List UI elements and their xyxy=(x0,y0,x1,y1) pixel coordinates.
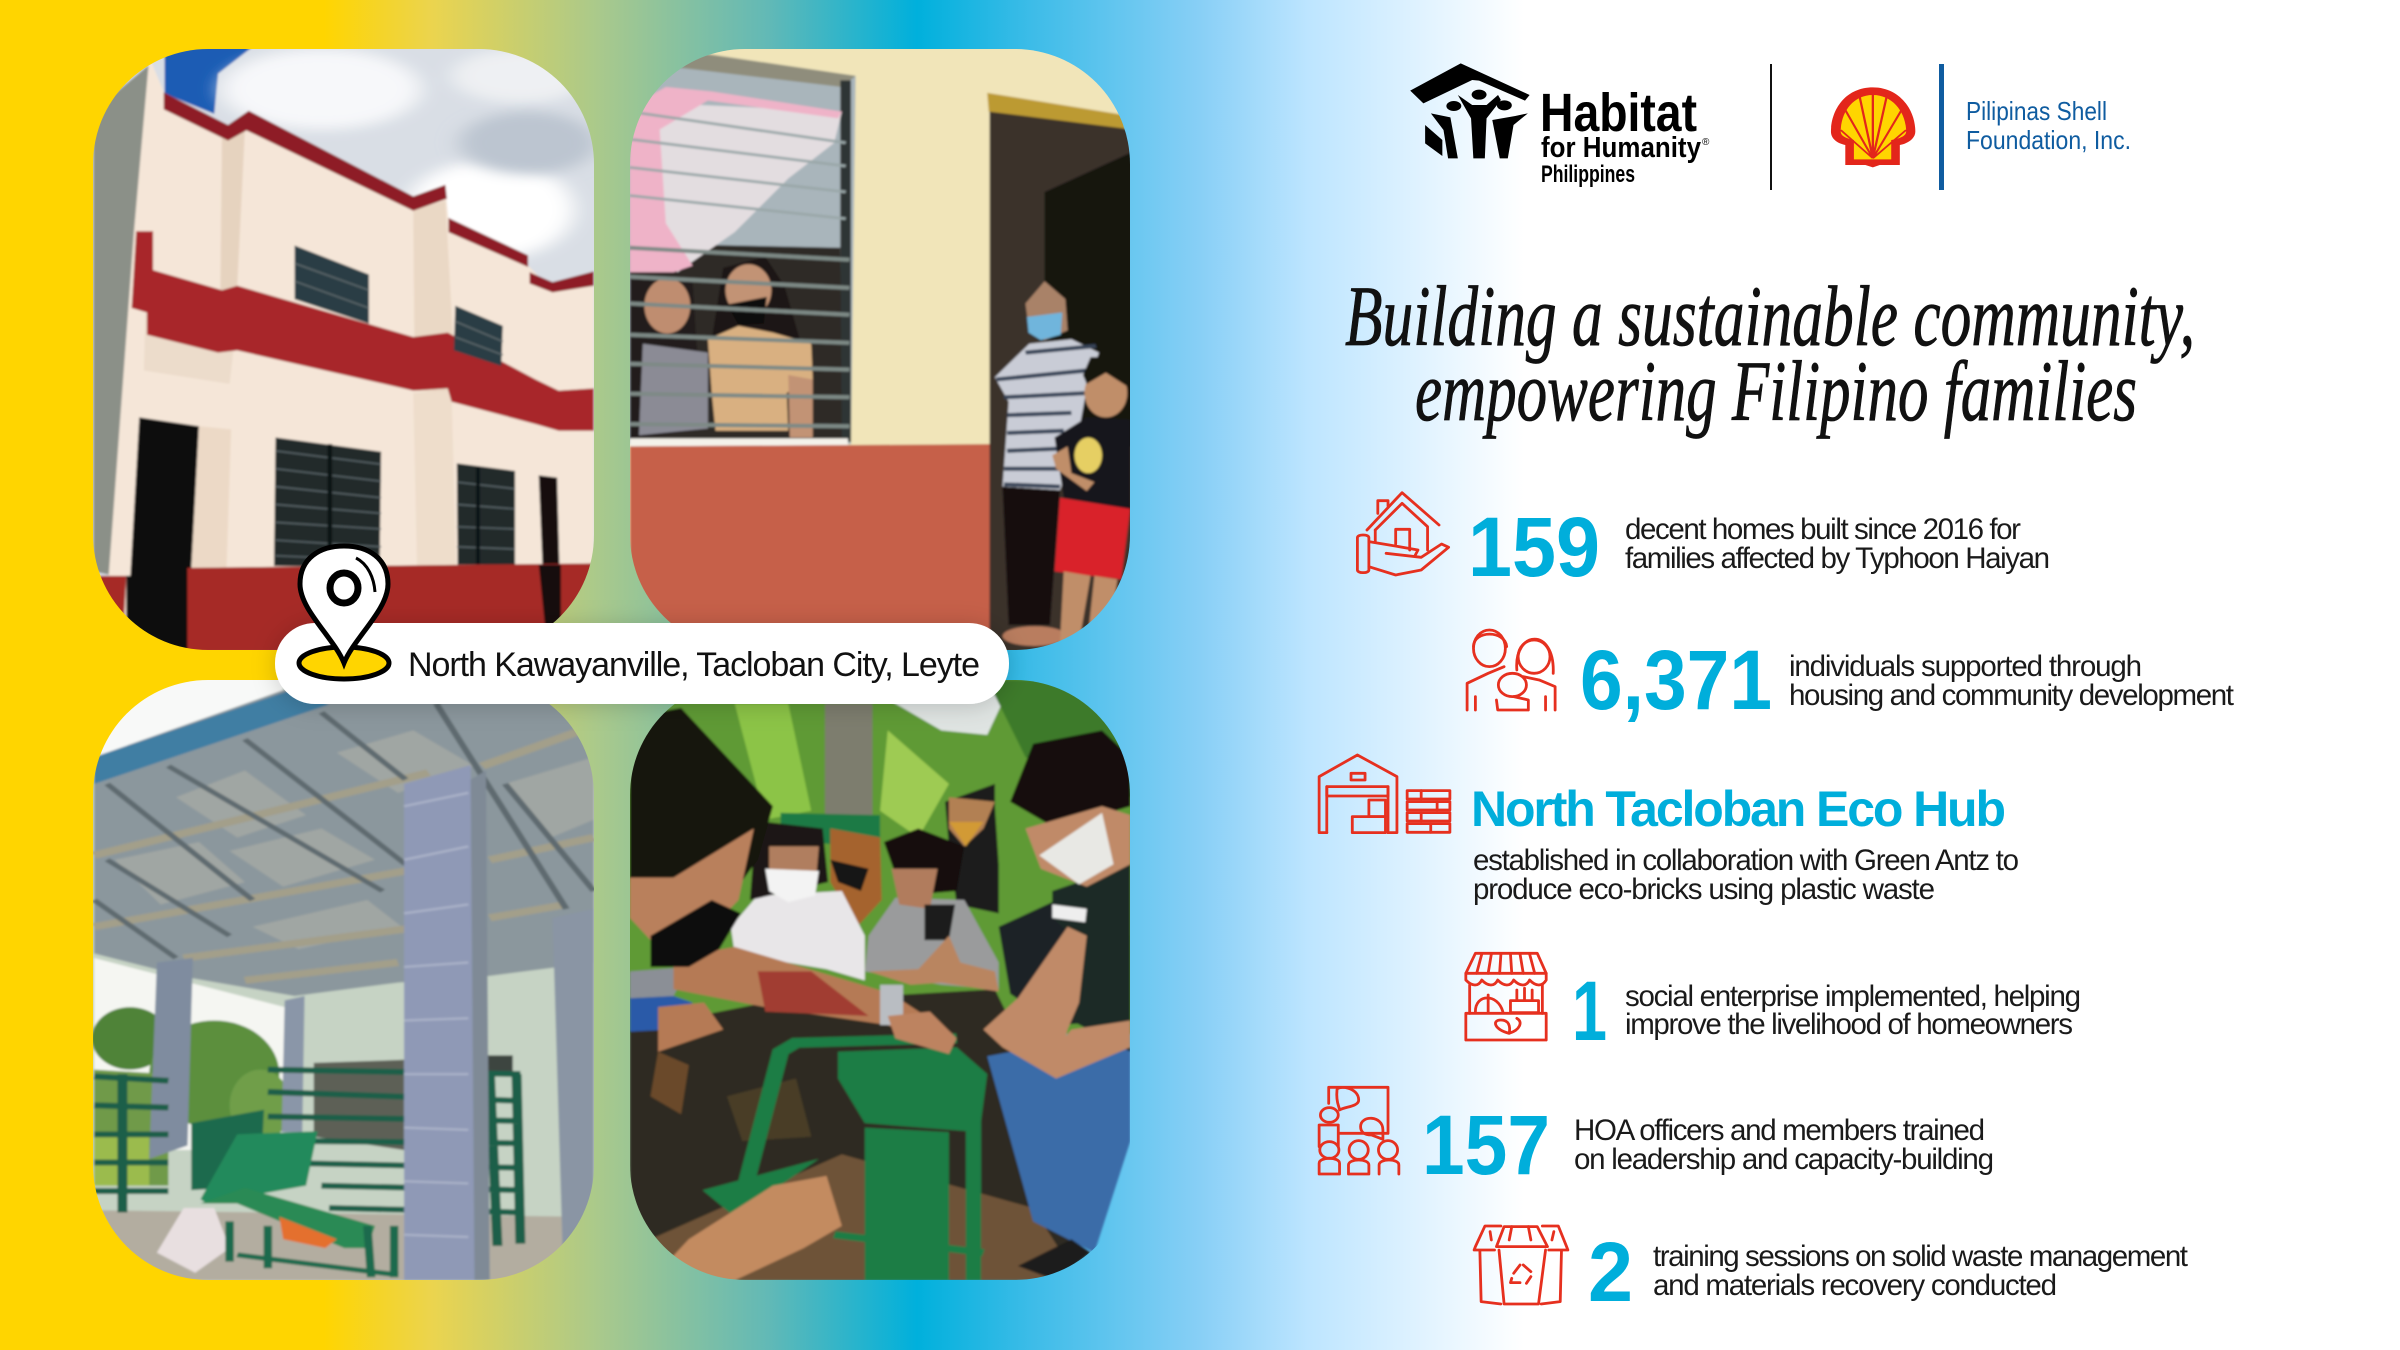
stat: 2 training sessions: and materials recovery conducted xyxy=(1653,1269,2057,1302)
stat: North Tacloban Eco Hub: North Tacloban Eco Hub xyxy=(1471,781,2006,837)
stat: 157 trained: 157 xyxy=(1422,1098,1550,1192)
logo: Habitat for Humanity Philippines: Habitat xyxy=(1540,83,1697,143)
icon: family xyxy=(1467,630,1555,710)
stat: 159 homes: 159 xyxy=(1468,500,1600,594)
photo: eco hub building xyxy=(92,677,597,1284)
stat: North Tacloban Eco Hub: established in collaboration with Green Antz to xyxy=(1473,844,2019,877)
stat: North Tacloban Eco Hub: produce eco-bricks using plastic waste xyxy=(1473,873,1935,906)
stat: 159 homes: decent homes built since 2016 for xyxy=(1625,513,2021,546)
icon: house in hand xyxy=(1357,493,1449,575)
stat: 2 training sessions: 2 xyxy=(1588,1225,1633,1319)
logo: Habitat for Humanity Philippines: ® xyxy=(1702,137,1710,148)
logo: Habitat for Humanity Philippines: Philippines xyxy=(1541,161,1635,188)
location pill xyxy=(275,546,1009,704)
stat: 1 social enterprise: social enterprise implemented, helping xyxy=(1625,980,2081,1013)
icon: map pin xyxy=(299,546,389,679)
title xyxy=(1345,268,2195,439)
logo text: Pilipinas Shell Foundation xyxy=(1966,96,2131,155)
stat: 157 trained: HOA officers and members trained xyxy=(1574,1114,1985,1147)
stat: 159 homes xyxy=(1357,493,2050,594)
logo text: Pilipinas Shell Foundation: Pilipinas Shell xyxy=(1966,96,2107,126)
icon: training session xyxy=(1319,1087,1399,1174)
stat: 1 social enterprise: improve the livelihood of homeowners xyxy=(1625,1008,2073,1041)
icon: market stall xyxy=(1466,953,1546,1040)
stat: 2 training sessions xyxy=(1474,1225,2188,1319)
location label: North Kawayanville, Tacloban City, Leyte xyxy=(408,646,980,684)
stat: 1 social enterprise: 1 xyxy=(1572,964,1607,1058)
stat: 6,371 individuals: individuals supported through xyxy=(1789,650,2142,683)
stat: 6,371 individuals xyxy=(1467,630,2234,727)
logo: Habitat for Humanity Philippines xyxy=(1410,63,1710,188)
stat: 6,371 individuals: 6,371 xyxy=(1580,633,1772,727)
logo text: Pilipinas Shell Foundation: Foundation, Inc. xyxy=(1966,125,2131,155)
logo: Habitat for Humanity Philippines: for Humanity xyxy=(1541,132,1701,164)
stat: North Tacloban Eco Hub xyxy=(1319,755,2019,906)
stat: 1 social enterprise xyxy=(1466,953,2081,1058)
stat: 157 trained xyxy=(1319,1087,1994,1192)
icon: warehouse and bricks xyxy=(1319,755,1450,833)
stat: 6,371 individuals: housing and community development xyxy=(1789,679,2234,712)
photo: group at water pump xyxy=(628,677,1133,1280)
stat: 159 homes: families affected by Typhoon Haiyan xyxy=(1625,542,2050,575)
photo: family at window and door xyxy=(628,45,1133,652)
stat: 157 trained: on leadership and capacity-building xyxy=(1574,1143,1994,1176)
logo: Shell pecten xyxy=(1831,87,1915,167)
icon: recycling bins xyxy=(1474,1226,1568,1304)
stat: 2 training sessions: training sessions on solid waste management xyxy=(1653,1240,2188,1273)
photo: two-storey houses xyxy=(92,45,597,652)
